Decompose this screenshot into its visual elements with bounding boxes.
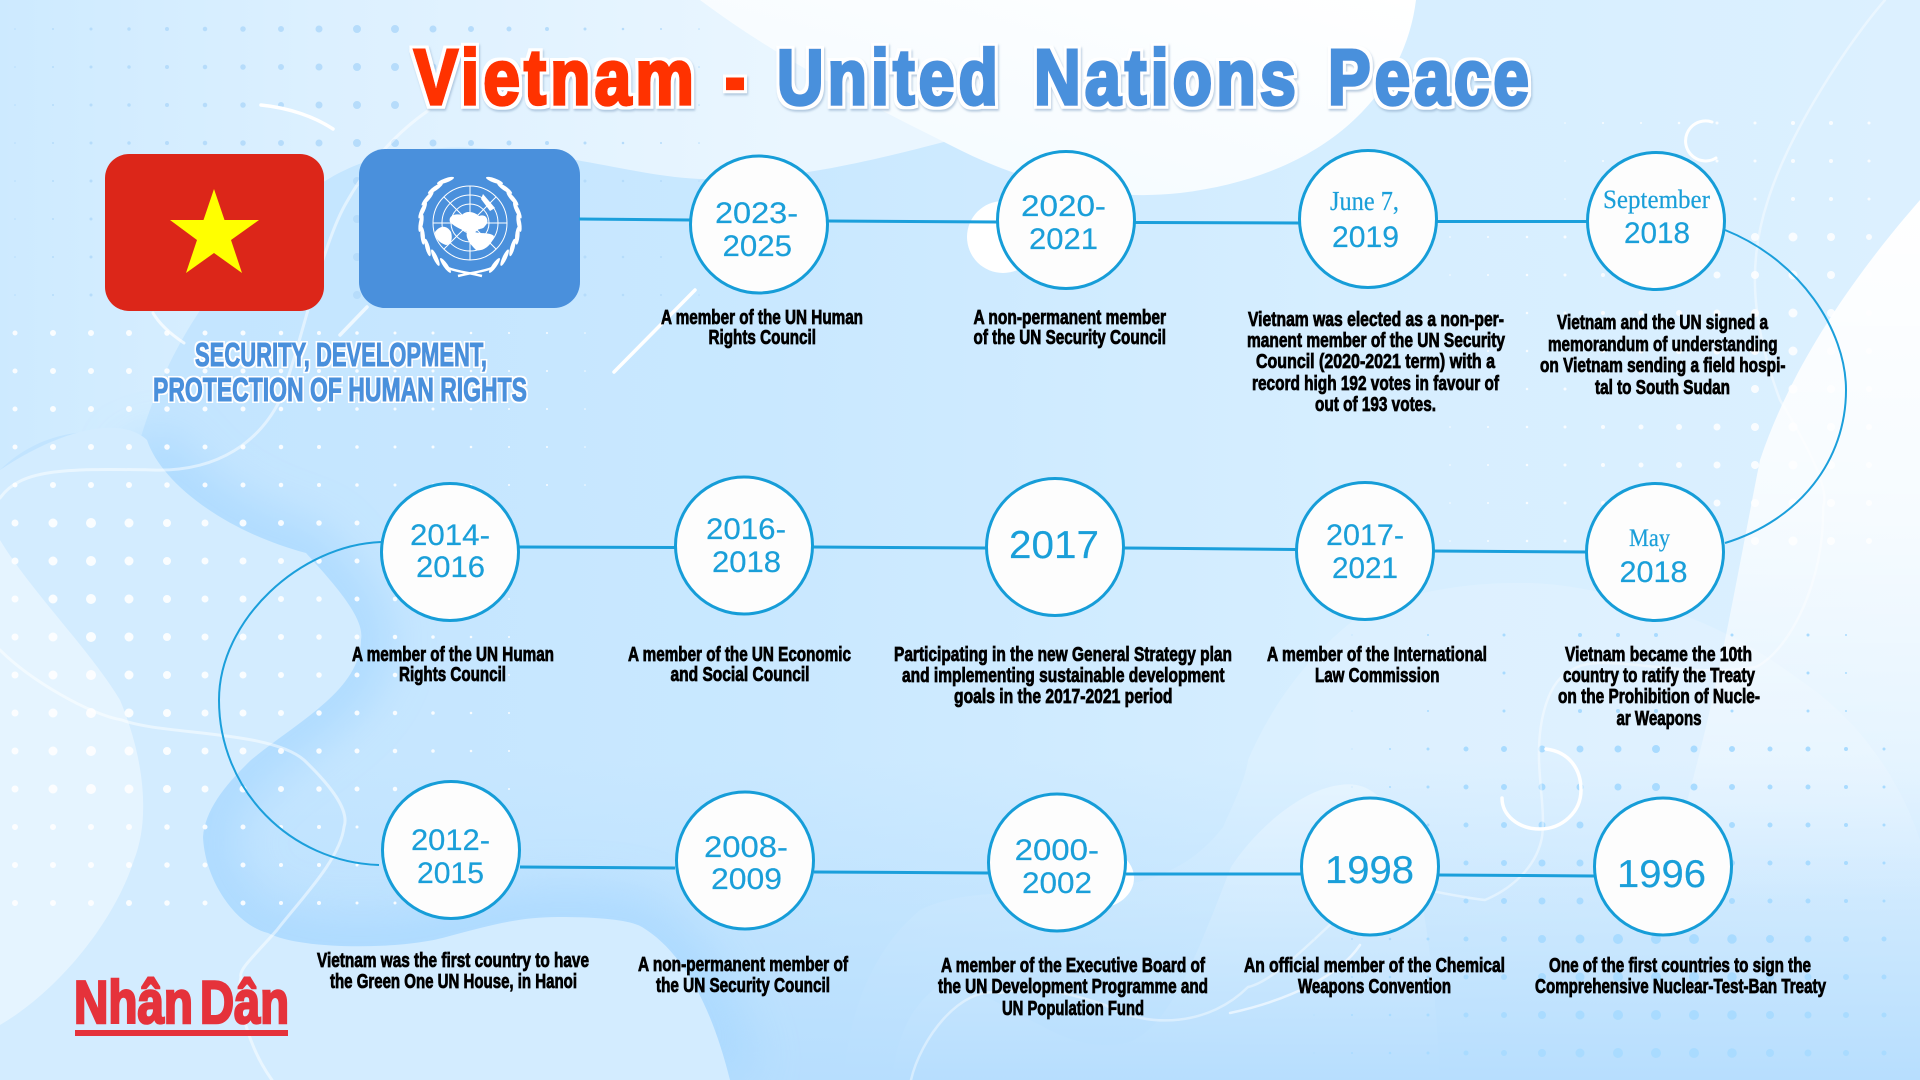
title: Vietnam: [414, 33, 698, 121]
node: September 2018: [1588, 152, 1724, 290]
flag: United Nations: [359, 149, 580, 308]
description: June 7, 2019: record high 192 votes in favour of: [1252, 373, 1499, 395]
description: 2016-2018: [628, 644, 851, 686]
description: June 7, 2019: manent member of the UN Security: [1247, 330, 1506, 352]
node: 1996: 1996: [1617, 853, 1706, 896]
description: 2014-2016: [352, 644, 554, 686]
node: September 2018: 2018: [1624, 217, 1690, 250]
node: 1998: [1302, 798, 1438, 935]
description: 2012-2015: [317, 950, 589, 993]
description: June 7, 2019: Council (2020-2021 term) with a: [1256, 351, 1496, 373]
description: 2017: Participating in the new General Strategy plan: [894, 644, 1232, 666]
description: 1996: [1535, 955, 1827, 998]
description: 1998: An official member of the Chemical: [1244, 955, 1505, 977]
description: 2012-2015: the Green One UN House, in Hanoi: [330, 971, 577, 993]
icon: UN emblem: [417, 175, 523, 276]
description: 1998: Weapons Convention: [1298, 976, 1451, 998]
description: 2017: and implementing sustainable development: [902, 665, 1225, 687]
description: 2000-2002: the UN Development Programme and: [938, 976, 1208, 998]
description: May 2018: ar Weapons: [1616, 708, 1702, 730]
title: Peace: [1328, 33, 1533, 121]
title: [414, 33, 1533, 121]
description: 2023-2025: Rights Council: [708, 327, 816, 349]
node: 2023-2025: [690, 156, 828, 293]
description: 2020-2021: A non-permanent member: [974, 307, 1166, 329]
description: September 2018: memorandum of understanding: [1548, 334, 1778, 356]
node: May 2018: May: [1629, 525, 1670, 552]
node: 2012-2015: 2015: [417, 857, 484, 890]
node: 2017-2021: 2021: [1332, 552, 1398, 585]
description: 2008-2009: [638, 954, 848, 997]
node: June 7, 2019: [1300, 150, 1436, 288]
dots: top-left: [15, 29, 699, 296]
node: 1996: [1594, 798, 1732, 935]
description: 2017: goals in the 2017-2021 period: [954, 686, 1172, 708]
description: September 2018: on Vietnam sending a field hospi-: [1540, 355, 1786, 377]
description: 2000-2002: A member of the Executive Board of: [941, 955, 1205, 977]
description: 2014-2016: Rights Council: [399, 664, 506, 686]
node: June 7, 2019: 2019: [1332, 221, 1399, 254]
node: 2017-2021: [1296, 482, 1434, 620]
description: September 2018: [1540, 312, 1786, 399]
node: 2014-2016: 2014-: [410, 519, 490, 552]
node: May 2018: 2018: [1620, 556, 1688, 589]
description: 2014-2016: A member of the UN Human: [352, 644, 554, 666]
subtitle: [153, 336, 527, 408]
node: 2016-2018: 2018: [712, 546, 781, 579]
description: 2008-2009: A non-permanent member of: [638, 954, 848, 976]
description: September 2018: Vietnam and the UN signed a: [1557, 312, 1769, 334]
description: May 2018: on the Prohibition of Nucle-: [1558, 686, 1760, 708]
description: 2017-2021: [1267, 644, 1487, 687]
title: -: [725, 33, 749, 121]
timeline connectors: [219, 219, 1846, 876]
description: 1996: Comprehensive Nuclear-Test-Ban Treaty: [1535, 976, 1827, 998]
node: 2020-2021: [998, 152, 1134, 288]
description: September 2018: tal to South Sudan: [1595, 377, 1730, 399]
dots: bottom-right blue: [1314, 635, 1884, 1054]
node: 2020-2021: 2021: [1029, 223, 1098, 256]
node: 2023-2025: 2025: [722, 230, 792, 263]
node: 2017: 2017: [1009, 524, 1099, 567]
description: May 2018: [1558, 644, 1760, 730]
node: 2020-2021: 2020-: [1021, 190, 1106, 223]
flag: Vietnam: [105, 154, 324, 311]
node: 2000-2002: 2002: [1022, 867, 1092, 900]
logo: Nhan Dan: Nhân: [74, 969, 193, 1036]
node: 2017: [986, 478, 1124, 616]
node: 2008-2009: [676, 792, 814, 929]
description: 2012-2015: Vietnam was the first country to have: [317, 950, 589, 972]
description: 2023-2025: [661, 307, 863, 349]
node: 2014-2016: 2016: [416, 551, 485, 584]
node: 1998: 1998: [1325, 849, 1414, 892]
dots: right white: [1450, 123, 1869, 542]
title: Nations: [1034, 33, 1300, 121]
node: 2012-2015: 2012-: [411, 824, 490, 857]
subtitle: PROTECTION OF HUMAN RIGHTS: [153, 371, 527, 408]
description: 2017-2021: Law Commission: [1315, 665, 1440, 687]
node: 2023-2025: 2023-: [715, 197, 798, 230]
logo: Nhan Dan: [74, 969, 289, 1036]
description: June 7, 2019: Vietnam was elected as a non-per-: [1248, 309, 1504, 331]
description: May 2018: country to ratify the Treaty: [1563, 665, 1756, 687]
description: 1998: [1244, 955, 1505, 998]
description: 1996: One of the first countries to sign the: [1549, 955, 1811, 977]
node: 2017-2021: 2017-: [1326, 519, 1404, 552]
logo: Nhan Dan: Dân: [200, 969, 289, 1036]
description: 2017: [894, 644, 1232, 708]
description: 2008-2009: the UN Security Council: [656, 975, 830, 997]
description: 2023-2025: A member of the UN Human: [661, 307, 863, 329]
title: United: [777, 33, 1002, 121]
dots: left white: [15, 333, 585, 904]
description: 2000-2002: UN Population Fund: [1002, 998, 1144, 1020]
node: 2012-2015: [382, 782, 520, 918]
node: May 2018: [1586, 484, 1724, 620]
description: 2020-2021: [974, 307, 1166, 349]
description: 2016-2018: A member of the UN Economic: [628, 644, 851, 666]
node: 2008-2009: 2008-: [704, 831, 788, 864]
node: 2016-2018: [676, 477, 812, 614]
description: June 7, 2019: [1247, 309, 1506, 416]
node: 2014-2016: [382, 484, 518, 620]
node: 2008-2009: 2009: [711, 863, 782, 896]
description: 2017-2021: A member of the International: [1267, 644, 1487, 666]
node: 2000-2002: [988, 794, 1126, 931]
description: June 7, 2019: out of 193 votes.: [1315, 394, 1436, 416]
description: 2020-2021: of the UN Security Council: [974, 327, 1166, 349]
description: 2000-2002: [938, 955, 1208, 1020]
node: 2000-2002: 2000-: [1015, 834, 1099, 867]
subtitle: SECURITY, DEVELOPMENT,: [195, 336, 487, 373]
description: 2016-2018: and Social Council: [670, 664, 810, 686]
description: May 2018: Vietnam became the 10th: [1565, 644, 1752, 666]
node: 2016-2018: 2016-: [706, 513, 786, 546]
node: September 2018: September: [1603, 185, 1710, 214]
node: June 7, 2019: June 7,: [1330, 186, 1399, 216]
